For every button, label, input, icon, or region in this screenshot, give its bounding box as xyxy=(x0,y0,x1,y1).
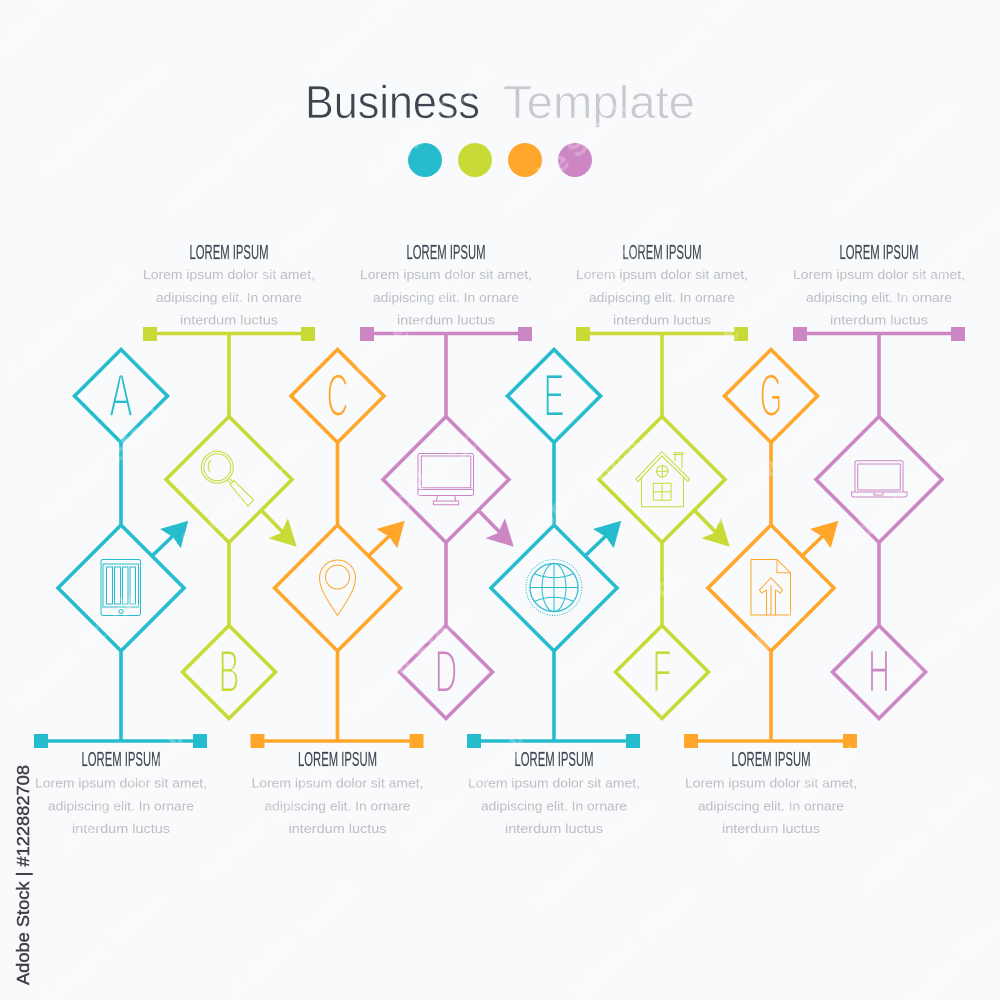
icon diamond xyxy=(491,525,617,651)
description xyxy=(252,776,424,836)
column B: magnifier xyxy=(143,242,315,718)
end squares xyxy=(360,327,532,341)
watermark pattern: Adobe Stock xyxy=(833,426,976,560)
description: adipiscing elit. In ornare xyxy=(373,290,519,305)
connector lines xyxy=(474,442,633,741)
letter B: B xyxy=(219,639,239,706)
arrow right-down xyxy=(262,511,297,547)
watermark pattern: Adobe Stock xyxy=(853,766,996,900)
connector lines xyxy=(41,442,200,741)
icon diamond xyxy=(58,525,184,651)
watermark pattern: Adobe Stock xyxy=(3,586,146,720)
icon diamond xyxy=(166,416,292,542)
description xyxy=(576,267,748,328)
title word: Template: Template xyxy=(503,76,695,128)
watermark pattern: Adobe Stock xyxy=(360,56,503,190)
watermark pattern: Adobe Stock xyxy=(373,396,516,530)
letter F: F xyxy=(652,639,672,706)
letter diamond G xyxy=(724,350,818,442)
arrow right-up xyxy=(803,521,838,555)
icon: magnifier xyxy=(201,451,254,506)
watermark pattern: Adobe Stock xyxy=(823,91,966,225)
watermark pattern: Adobe Stock xyxy=(338,596,481,730)
watermark pattern: Adobe Stock xyxy=(503,426,646,560)
description: interdum luctus xyxy=(722,821,821,836)
description xyxy=(360,267,532,328)
description: interdum luctus xyxy=(180,312,279,328)
arrow right-down xyxy=(479,511,514,547)
column C: pin xyxy=(250,350,424,836)
end squares xyxy=(467,734,640,748)
column A: tablet xyxy=(34,350,207,836)
icon diamond xyxy=(708,525,834,651)
icon: map pin xyxy=(320,560,356,616)
description: Lorem ipsum dolor sit amet, xyxy=(35,776,207,790)
watermark pattern: Adobe Stock xyxy=(158,91,301,225)
arrow right-up xyxy=(586,521,621,555)
connector lines xyxy=(691,442,850,741)
letter diamond D xyxy=(400,626,492,718)
description: adipiscing elit. In ornare xyxy=(589,290,735,305)
letter G: G xyxy=(760,361,782,429)
description: Lorem ipsum dolor sit amet, xyxy=(468,776,640,790)
icon: laptop xyxy=(852,461,907,497)
letter diamond F xyxy=(616,626,708,718)
description: interdum luctus xyxy=(505,821,604,836)
connector lines xyxy=(583,333,741,625)
description: adipiscing elit. In ornare xyxy=(264,798,410,814)
description: adipiscing elit. In ornare xyxy=(48,798,194,814)
description: Lorem ipsum dolor sit amet, xyxy=(685,776,857,790)
icon diamond xyxy=(274,525,400,651)
label: LOREM IPSUM xyxy=(514,749,594,771)
watermark pattern: Adobe Stock xyxy=(543,196,686,330)
description: adipiscing elit. In ornare xyxy=(698,798,844,814)
connector lines xyxy=(367,333,525,625)
watermark pattern: Adobe Stock xyxy=(548,561,691,695)
end squares xyxy=(684,734,857,748)
description: Lorem ipsum dolor sit amet, xyxy=(143,267,315,282)
letter diamond C xyxy=(291,350,384,442)
column F: house xyxy=(576,242,748,718)
description: interdum luctus xyxy=(613,312,712,328)
watermark pattern: Adobe Stock xyxy=(53,726,196,860)
description: Lorem ipsum dolor sit amet, xyxy=(576,267,748,282)
end squares xyxy=(143,327,315,341)
letter C: C xyxy=(327,363,348,430)
watermark pattern: Adobe Stock xyxy=(173,426,316,560)
icon: globe xyxy=(526,560,582,616)
description: adipiscing elit. In ornare xyxy=(156,290,302,305)
end squares xyxy=(576,327,748,341)
description: adipiscing elit. In ornare xyxy=(481,798,627,814)
description: Lorem ipsum dolor sit amet, xyxy=(252,776,424,790)
watermark pattern: Adobe Stock xyxy=(393,726,536,860)
connector lines xyxy=(258,442,416,741)
description xyxy=(35,776,207,836)
label: LOREM IPSUM xyxy=(190,242,268,264)
watermark pattern: Adobe Stock xyxy=(668,596,811,730)
label: LOREM IPSUM xyxy=(732,749,810,771)
description: interdum luctus xyxy=(288,821,387,836)
watermark pattern: Adobe Stock xyxy=(693,66,836,200)
label: LOREM IPSUM xyxy=(298,749,377,771)
description xyxy=(793,267,965,328)
label: LOREM IPSUM xyxy=(406,242,486,264)
icon: file with up arrow xyxy=(751,560,790,615)
watermark pattern: Adobe Stock xyxy=(333,261,476,395)
letter diamond H xyxy=(832,626,926,718)
description: interdum luctus xyxy=(72,821,171,836)
description: adipiscing elit. In ornare xyxy=(806,290,952,305)
connector lines xyxy=(800,333,958,625)
description: Lorem ipsum dolor sit amet, xyxy=(360,267,532,282)
label: LOREM IPSUM xyxy=(840,242,918,264)
connector lines xyxy=(150,333,308,625)
watermark pattern: Adobe Stock xyxy=(33,396,176,530)
watermark pattern: Adobe Stock xyxy=(523,786,666,920)
letter diamond A xyxy=(74,350,168,442)
letter diamond B xyxy=(182,626,276,718)
column D: monitor xyxy=(360,242,532,718)
letter E: E xyxy=(544,363,564,430)
watermark pattern: Adobe Stock xyxy=(193,756,336,890)
column E: globe xyxy=(467,350,640,836)
stock attribution: Adobe Stock | #122882708 xyxy=(13,765,33,985)
watermark pattern: Adobe Stock xyxy=(33,51,176,185)
watermark pattern: Adobe Stock xyxy=(663,261,806,395)
arrow right-down xyxy=(695,511,730,547)
icon: house xyxy=(636,452,690,507)
watermark pattern: Adobe Stock xyxy=(493,91,636,225)
column H: laptop xyxy=(793,242,965,718)
watermark pattern: Adobe Stock xyxy=(723,736,866,870)
icon diamond xyxy=(816,416,942,542)
column G: file upload xyxy=(684,350,857,836)
letter diamond E xyxy=(508,350,600,442)
title xyxy=(305,76,695,128)
end squares xyxy=(793,327,965,341)
watermark pattern: Adobe Stock xyxy=(703,396,846,530)
colour dots xyxy=(408,143,592,177)
label: LOREM IPSUM xyxy=(622,242,702,264)
letter D: D xyxy=(435,639,457,706)
end squares xyxy=(250,734,424,748)
end squares xyxy=(34,734,207,748)
arrow right-up xyxy=(153,521,188,555)
description: Lorem ipsum dolor sit amet, xyxy=(793,267,965,282)
arrow right-up xyxy=(370,521,405,555)
watermark pattern: Adobe Stock xyxy=(203,196,346,330)
icon: monitor xyxy=(418,454,474,505)
description: interdum luctus xyxy=(830,312,929,328)
icon: tablet xyxy=(101,560,140,616)
icon diamond xyxy=(383,416,509,542)
description xyxy=(468,776,640,836)
description xyxy=(143,267,315,328)
watermark pattern: Adobe Stock xyxy=(0,256,141,390)
label: LOREM IPSUM xyxy=(82,749,160,771)
letter H: H xyxy=(868,639,890,706)
description xyxy=(685,776,857,836)
icon diamond xyxy=(599,416,725,542)
title word: Business: Business xyxy=(305,76,480,128)
description: interdum luctus xyxy=(397,312,496,328)
letter A: A xyxy=(109,363,133,429)
